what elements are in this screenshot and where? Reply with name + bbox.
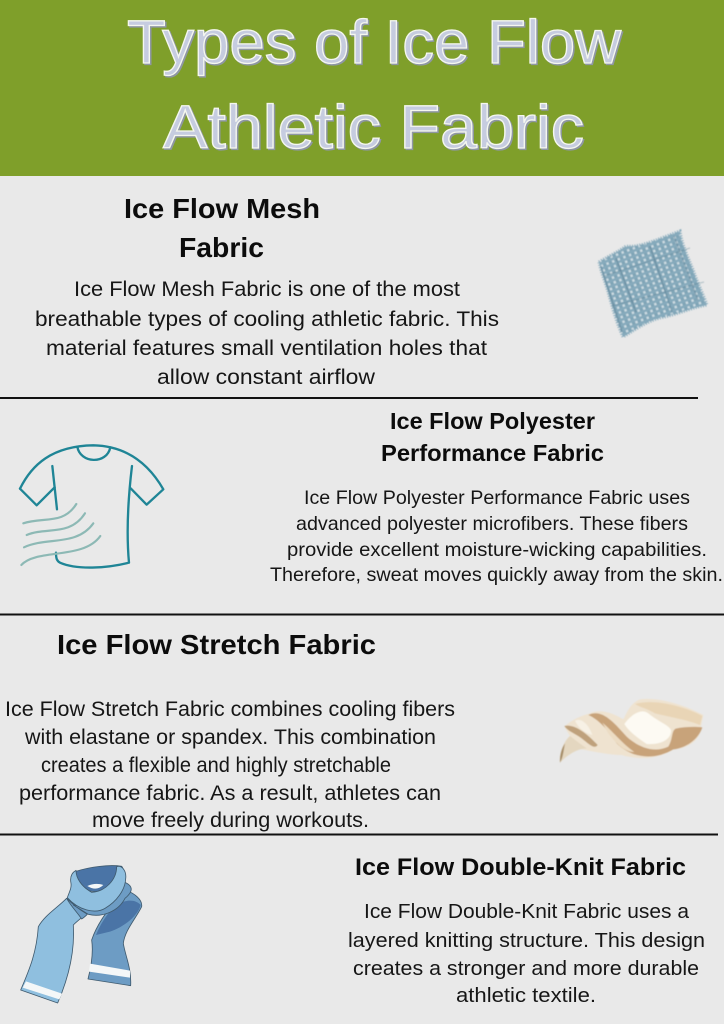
- icon: t-shirt with airflow: [20, 445, 163, 568]
- text: double-knit fabric description: layered knitting structure. This design: [348, 929, 705, 952]
- text: stretch fabric description: move freely during workouts.: [92, 808, 369, 832]
- text: mesh fabric description: allow constant airflow: [157, 365, 375, 389]
- text: polyester fabric description: Ice Flow Polyester Performance Fabric uses: [304, 487, 690, 509]
- heading: stretch fabric: Ice Flow Stretch Fabric: [57, 629, 376, 660]
- title: Athletic Fabric: [163, 93, 584, 161]
- heading: polyester fabric: [381, 408, 604, 466]
- text: stretch fabric description: with elastane or spandex. This combination: [24, 725, 436, 749]
- heading: mesh fabric: Fabric: [179, 232, 264, 263]
- text: polyester fabric description: [270, 487, 723, 586]
- text: mesh fabric description: breathable types of cooling athletic fabric. This: [35, 307, 499, 331]
- text: stretch fabric description: Ice Flow Stretch Fabric combines cooling fibers: [5, 697, 455, 721]
- panel: mesh fabric: [35, 193, 707, 389]
- text: mesh fabric description: [35, 277, 499, 389]
- title: Athletic Fabric: [164, 94, 586, 162]
- panel: polyester performance fabric: [20, 408, 723, 586]
- divider 1: [0, 397, 698, 399]
- panel: stretch fabric: [5, 629, 703, 832]
- text: stretch fabric description: performance fabric. As a result, athletes can: [19, 781, 441, 805]
- title: [127, 8, 623, 162]
- text: polyester fabric description: advanced polyester microfibers. These fibers: [296, 513, 688, 535]
- text: stretch fabric description: [5, 697, 455, 832]
- text: double-knit fabric description: creates a stronger and more durable: [353, 957, 699, 980]
- icon: scarf: [21, 866, 142, 1003]
- heading: polyester fabric: Performance Fabric: [381, 440, 604, 466]
- heading: polyester fabric: Ice Flow Polyester: [390, 408, 595, 434]
- divider 2: [0, 614, 724, 616]
- text: polyester fabric description: provide excellent moisture-wicking capabilities.: [287, 539, 707, 561]
- icon: silk fabric: [560, 699, 703, 763]
- text: double-knit fabric description: [348, 900, 705, 1007]
- text: double-knit fabric description: Ice Flow Double-Knit Fabric uses a: [364, 900, 690, 923]
- panel: double-knit fabric: [21, 854, 705, 1007]
- heading: mesh fabric: [124, 193, 320, 263]
- text: mesh fabric description: material features small ventilation holes that: [46, 336, 487, 360]
- divider 3: [0, 834, 718, 836]
- title: Types of Ice Flow: [127, 8, 622, 76]
- header banner: [0, 0, 724, 176]
- text: mesh fabric description: Ice Flow Mesh Fabric is one of the most: [74, 277, 460, 301]
- text: double-knit fabric description: athletic textile.: [456, 984, 596, 1007]
- text: polyester fabric description: Therefore, sweat moves quickly away from the skin.: [270, 564, 723, 586]
- icon: mesh fabric swatch: [599, 231, 707, 337]
- title: Types of Ice Flow: [128, 10, 623, 78]
- text: stretch fabric description: creates a flexible and highly stretchable: [41, 753, 391, 777]
- heading: mesh fabric: Ice Flow Mesh: [124, 193, 320, 224]
- heading: double-knit fabric: Ice Flow Double-Knit Fabric: [355, 854, 686, 881]
